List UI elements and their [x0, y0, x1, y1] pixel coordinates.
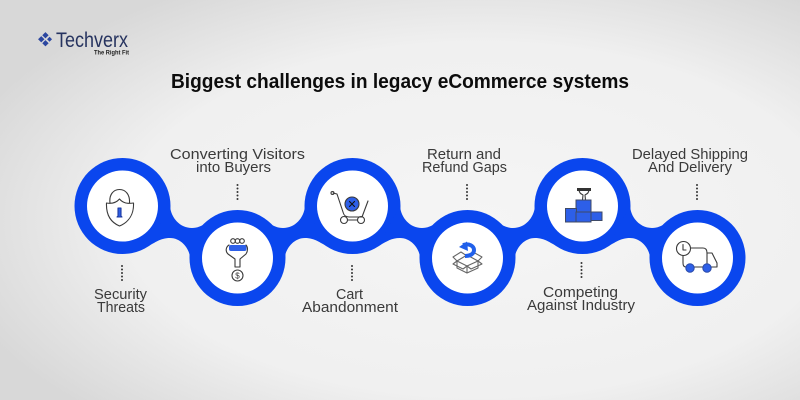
connector dots: Cart Abandonment [351, 265, 353, 281]
connector dots: Delayed Shipping [696, 184, 698, 200]
label: Return and Refund Gaps: Refund Gaps [422, 160, 507, 176]
icon: shopping cart with cross [331, 192, 368, 224]
label: Delayed Shipping And Delivery: And Delivery [648, 160, 733, 176]
label: Delayed Shipping And Delivery: Delayed Shipping [632, 147, 748, 163]
icon: conversion funnel: $ [235, 272, 240, 280]
icon: delivery truck with clock [676, 242, 717, 272]
icon: podium and trophy [566, 188, 602, 222]
label: Converting Visitors into Buyers: into Buyers [196, 160, 271, 176]
icon: conversion funnel [226, 239, 248, 281]
label: Return and Refund Gaps [422, 147, 507, 176]
icon: logo diamond [38, 32, 52, 46]
label: Security Threats [94, 287, 148, 316]
icon: return box [453, 242, 482, 273]
label: Delayed Shipping And Delivery [632, 147, 748, 176]
logo tagline: The Right Fit [94, 50, 130, 56]
label: Return and Refund Gaps: Return and [427, 147, 501, 163]
connector dots: Security Threats [121, 265, 123, 281]
label: Cart Abandonment: Cart [336, 287, 363, 303]
label: Competing Against Industry: Against Industry [527, 298, 636, 314]
logo: Techverx [38, 29, 130, 56]
chain: blue linked rings [74, 158, 746, 306]
label: Cart Abandonment: Abandonment [302, 300, 398, 316]
label: Competing Against Industry [527, 285, 636, 314]
logo wordmark: Techverx [56, 29, 128, 52]
connector dots: Return and Refund [466, 184, 468, 200]
connector dots: Converting Visitors [236, 184, 238, 200]
label: Security Threats: Security [94, 287, 148, 303]
connector dots: Competing [580, 262, 582, 278]
label: Competing Against Industry: Competing [543, 285, 618, 301]
label: Converting Visitors into Buyers [170, 147, 305, 176]
label: Converting Visitors into Buyers: Converting Visitors [170, 147, 305, 163]
label: Security Threats: Threats [97, 300, 145, 316]
title: Biggest challenges in legacy eCommerce systems [171, 71, 629, 93]
label: Cart Abandonment [302, 287, 398, 316]
icon: security shield lock [106, 190, 134, 226]
